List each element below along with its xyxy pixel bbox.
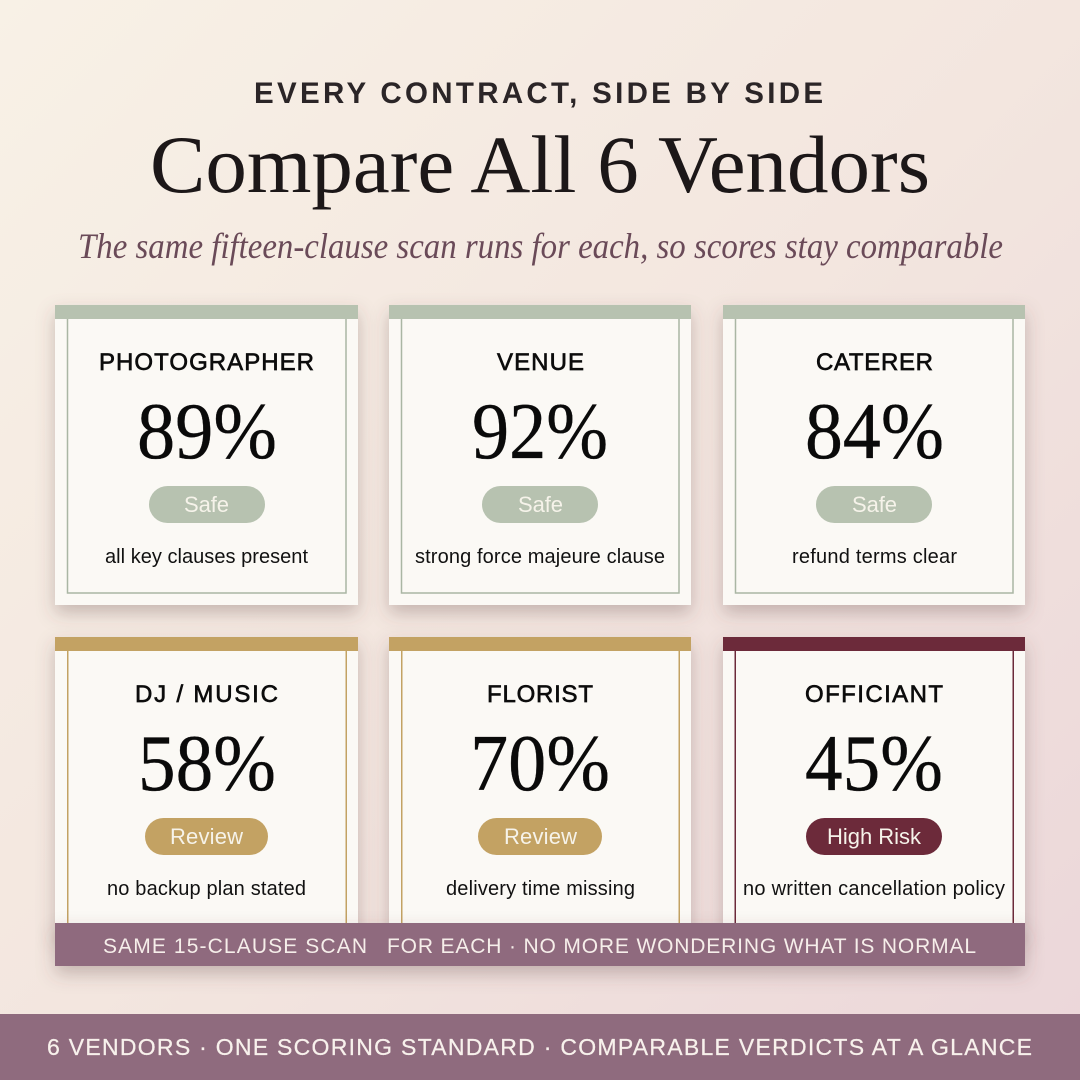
panel: photographer: 89% [137, 386, 277, 476]
panel: dj / music: no backup plan stated [107, 878, 306, 900]
panel: venue: strong force majeure clause [415, 546, 665, 568]
panel: photographer: Safe [184, 492, 229, 517]
panel: dj / music: 58% [138, 718, 276, 808]
panel: venue [389, 305, 691, 605]
panel: florist [389, 637, 691, 937]
panel: dj / music [55, 637, 358, 937]
panel: officiant [723, 637, 1025, 937]
footer band [0, 1014, 1080, 1080]
callout strip: SAME 15-CLAUSE SCAN [103, 935, 367, 958]
panel: officiant: no written cancellation policy [743, 878, 1005, 900]
panel: caterer: Safe [852, 492, 897, 517]
panel: officiant: 45% [805, 718, 943, 808]
panel: caterer [723, 305, 1025, 605]
panel: venue: Safe [518, 492, 563, 517]
panel: photographer: PHOTOGRAPHER [99, 349, 314, 376]
callout strip: FOR EACH · NO MORE WONDERING WHAT IS NORMAL [387, 935, 976, 958]
panel: venue: 92% [472, 386, 608, 476]
panel: officiant: OFFICIANT [805, 681, 943, 708]
panel: florist: 70% [470, 718, 610, 808]
eyebrow heading: EVERY CONTRACT, SIDE BY SIDE [254, 77, 823, 110]
panel: caterer: CATERER [816, 349, 933, 376]
panel: caterer: refund terms clear [792, 546, 957, 568]
title: Compare All 6 Vendors [150, 119, 930, 210]
panel: florist: FLORIST [487, 681, 593, 708]
panel: photographer [55, 305, 358, 605]
panel: caterer: 84% [805, 386, 944, 476]
subtitle: The same fifteen-clause scan runs for each, so scores stay comparable [78, 226, 1003, 266]
panel: officiant: High Risk [827, 824, 922, 849]
panel: dj / music: DJ / MUSIC [135, 681, 278, 708]
panel: florist: Review [504, 824, 577, 849]
panel: venue: VENUE [497, 349, 584, 376]
panel: photographer: all key clauses present [105, 546, 308, 568]
panel: florist: delivery time missing [446, 878, 635, 900]
callout strip [55, 923, 1025, 966]
panel: dj / music: Review [170, 824, 243, 849]
footer band: 6 VENDORS · ONE SCORING STANDARD · COMPARABLE VERDICTS AT A GLANCE [47, 1034, 1032, 1060]
